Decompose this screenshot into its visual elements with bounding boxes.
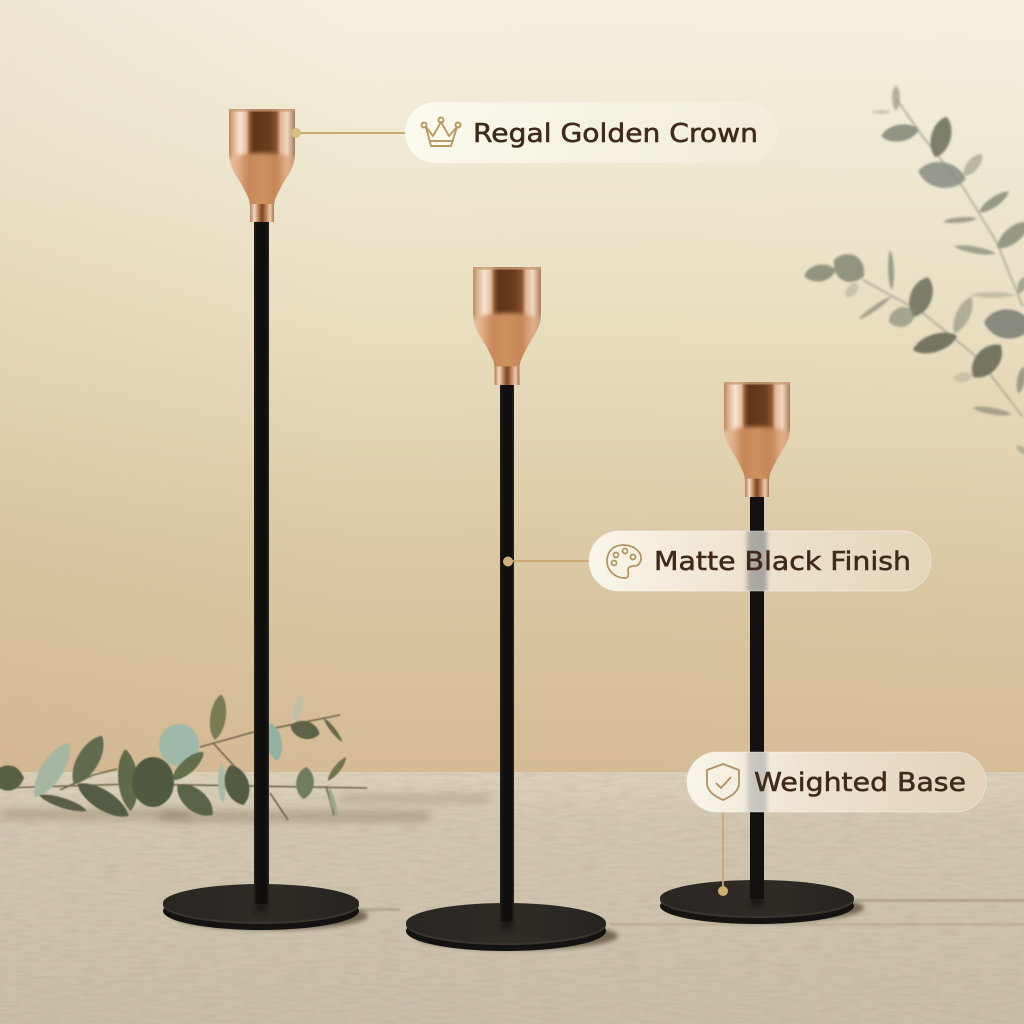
callout: Weighted Base [687,740,986,896]
tall copper cup [226,109,298,222]
pill [405,102,778,163]
short round base [660,880,854,924]
medium stem [500,385,514,922]
short copper cup [721,382,793,497]
icon: palette [607,545,641,578]
eucalyptus branch on table [0,693,367,824]
leader line [718,812,728,896]
pill with frosted stem behind [588,530,932,592]
candle holder: short [660,382,854,924]
shadow branch: eucalyptus on wall [803,85,1024,457]
label text: Regal Golden Crown [473,119,758,149]
tall round base [163,884,359,930]
table surface with linen texture [0,772,1024,1024]
medium round base [406,903,606,951]
tall stem [254,222,269,904]
background wall [0,0,1024,775]
callout: Matte Black Finish [503,530,932,592]
leader line [291,128,405,138]
label text: Weighted Base [754,768,966,798]
pill with frosted stem behind [686,752,986,812]
label text: Matte Black Finish [654,547,911,577]
icon: shield check [707,764,739,800]
candle holder: medium [406,267,606,951]
callout: Regal Golden Crown [291,102,778,163]
leader line [503,556,589,566]
candle holder: tall [163,109,359,930]
icon: crown [422,118,460,146]
shadows on table [0,795,1024,950]
short stem [750,497,764,899]
medium copper cup [470,267,544,385]
